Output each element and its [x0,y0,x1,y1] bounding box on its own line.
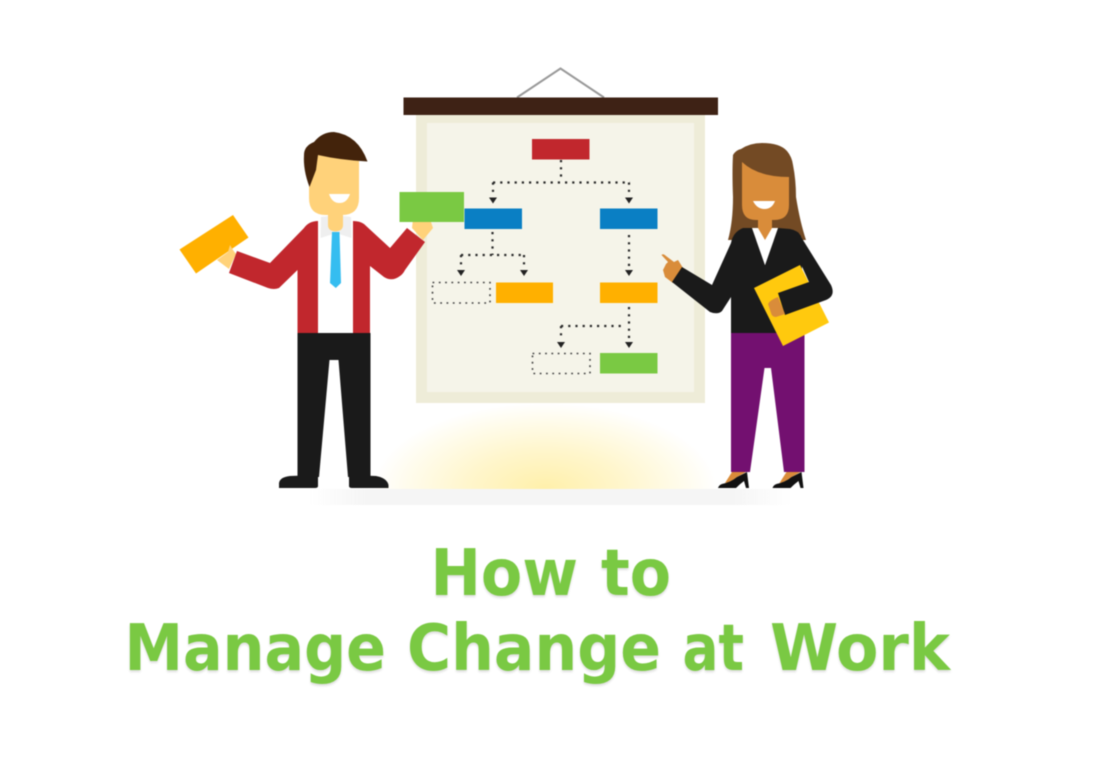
blue box left [464,208,522,229]
floor glow [310,403,790,505]
orange box left [496,282,553,303]
trousers [298,333,370,477]
orange card [180,215,248,274]
title [124,537,951,686]
smile [753,201,775,209]
right hand [412,219,433,240]
jacket and arms [229,221,318,334]
hanger wire [517,68,604,98]
title line 1: How [430,537,578,611]
hair [304,132,368,187]
man figure [180,132,464,488]
title line 1: to [601,537,671,611]
title line 2: Change [407,612,661,686]
green box [600,353,658,374]
blouse [752,228,778,265]
pointing hand [662,254,683,283]
face [742,162,789,220]
shirt [318,222,353,334]
title line 2: Manage [124,612,386,686]
title line 2: at [682,612,744,686]
green card [400,192,464,222]
face [309,150,359,215]
heels [725,472,746,483]
title line 2 [124,612,951,686]
blue box right [600,208,658,229]
flowchart connectors [461,160,630,340]
title line 2: Work [770,612,951,686]
orange box right [600,282,658,303]
dotted empty box left [432,282,490,303]
dotted empty box bottom [532,354,590,374]
smile [329,194,350,203]
trousers [731,333,804,472]
poster paper [416,115,705,403]
hair [728,143,806,240]
red box [532,139,590,160]
title line 1 [430,537,671,611]
tie [330,232,341,288]
hand on folder [768,297,785,317]
wall chart poster [404,68,718,403]
yellow folder [754,265,829,346]
left hand [217,245,236,269]
jacket and pointing arm [672,228,804,333]
flowchart [432,139,658,374]
woman figure [662,143,833,488]
poster top bar [404,98,718,115]
holding arm [778,232,833,315]
neck [758,215,772,240]
flowchart arrowheads [457,198,633,348]
shoes [279,475,318,488]
neck and collar [320,216,352,238]
